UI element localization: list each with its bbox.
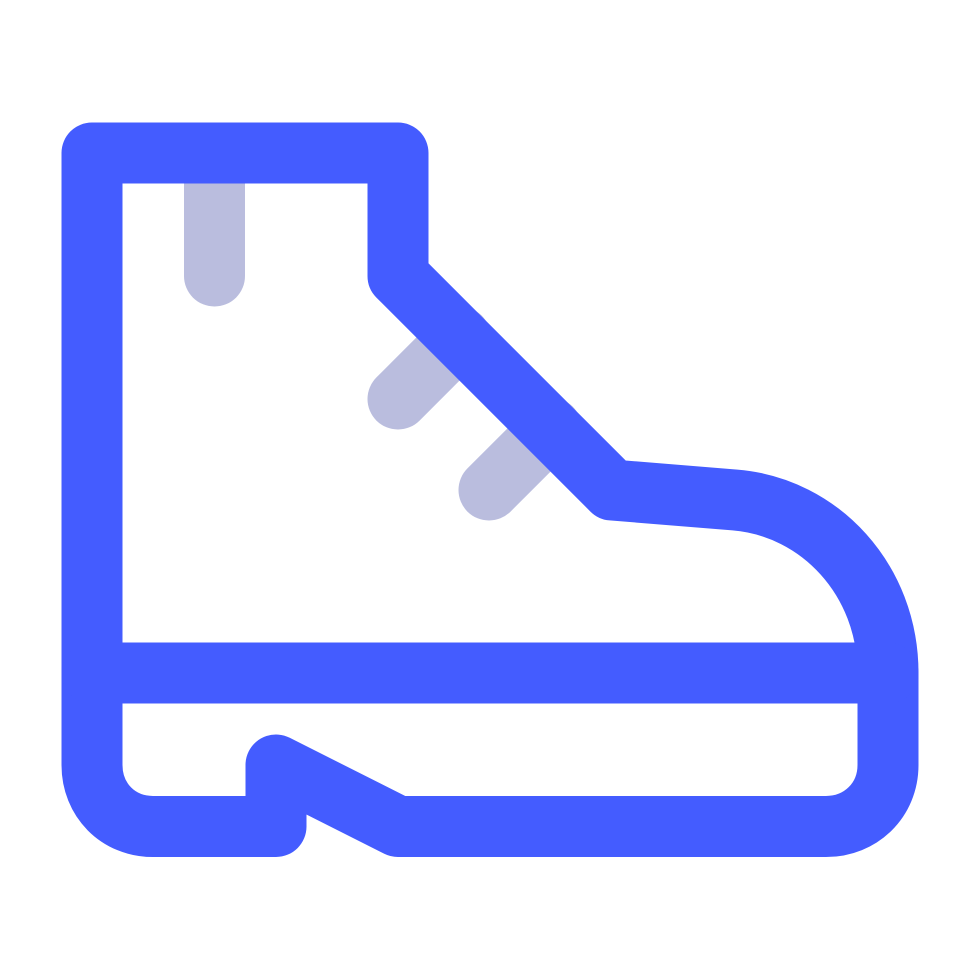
boot laces — [214, 160, 551, 490]
boot outline — [92, 153, 888, 826]
